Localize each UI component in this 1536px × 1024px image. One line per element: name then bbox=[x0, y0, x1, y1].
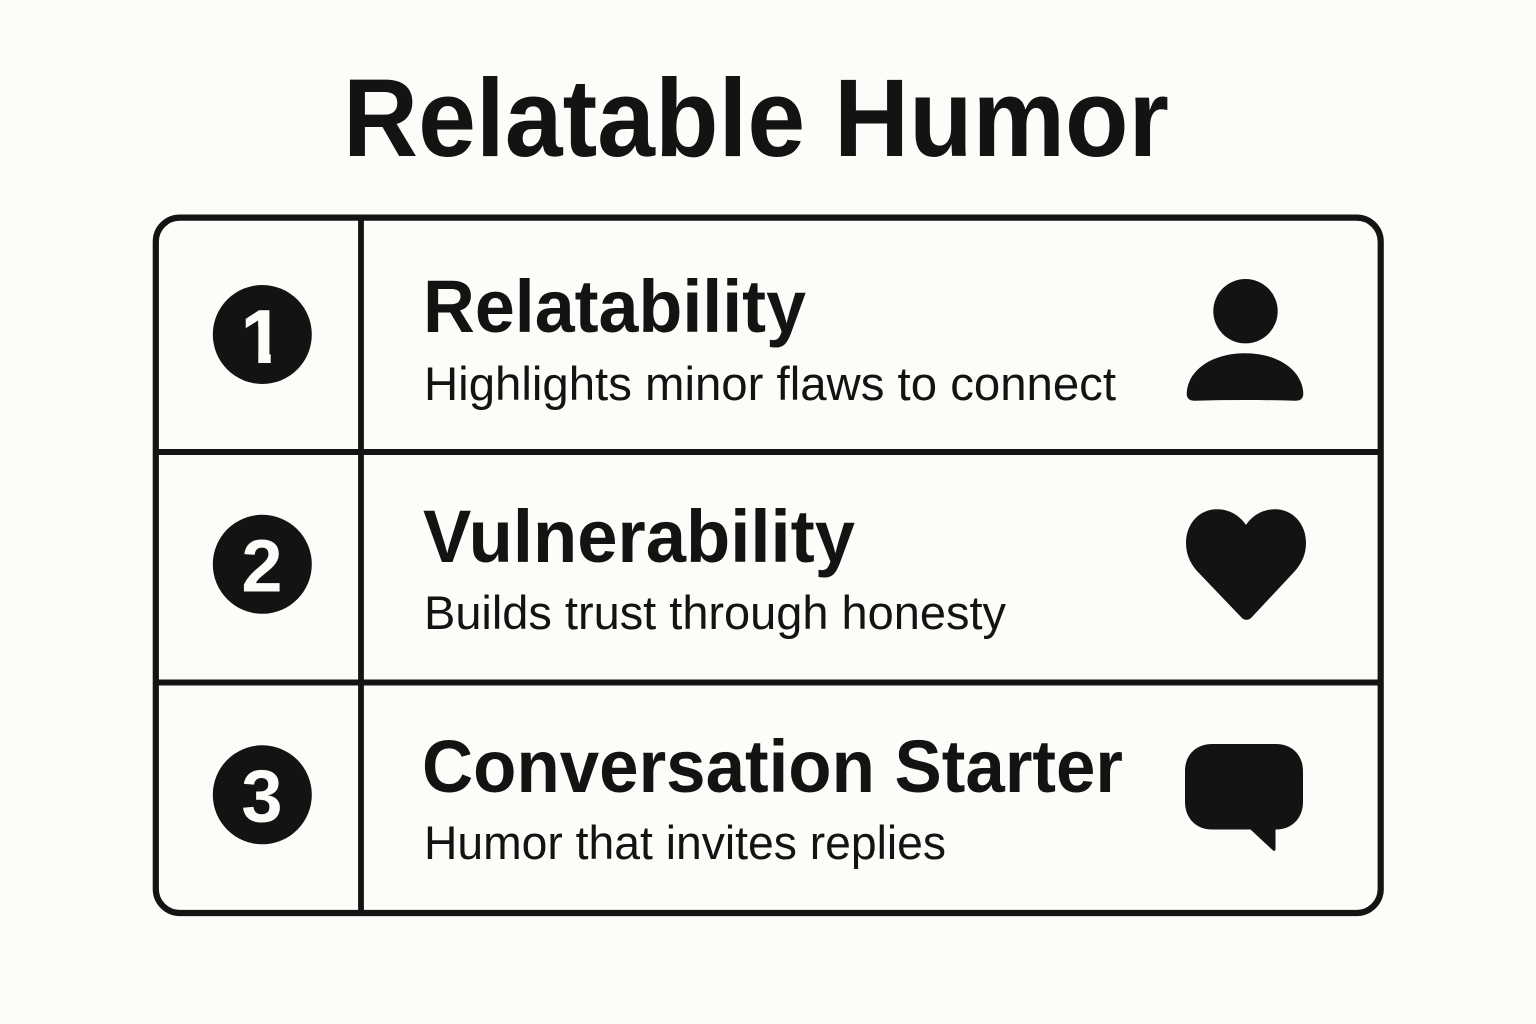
row 1: relatability bbox=[213, 265, 1303, 410]
number badge 2: 2 bbox=[241, 525, 283, 608]
heading: relatability: Relatability bbox=[423, 265, 806, 348]
icon: person bbox=[1187, 279, 1303, 401]
heading: vulnerability: Vulnerability bbox=[423, 495, 855, 578]
title: Relatable Humor bbox=[343, 57, 1169, 180]
number badge 1 bbox=[213, 285, 312, 384]
row 3: conversation starter bbox=[213, 725, 1303, 869]
number badge 3 bbox=[213, 745, 312, 844]
icon: heart bbox=[1186, 509, 1306, 620]
description: conversation starter: Humor that invites replies bbox=[424, 816, 946, 869]
row 2: vulnerability bbox=[213, 495, 1306, 639]
number badge 3: 3 bbox=[241, 754, 283, 838]
description: relatability: Highlights minor flaws to connect bbox=[424, 357, 1116, 410]
number badge 1: 1 bbox=[241, 295, 283, 379]
number badge 2 bbox=[213, 515, 312, 614]
icon: speech bubble bbox=[1185, 744, 1303, 851]
table panel bbox=[156, 218, 1381, 913]
description: vulnerability: Builds trust through honesty bbox=[424, 586, 1006, 639]
heading: conversation starter: Conversation Starter bbox=[422, 725, 1123, 808]
